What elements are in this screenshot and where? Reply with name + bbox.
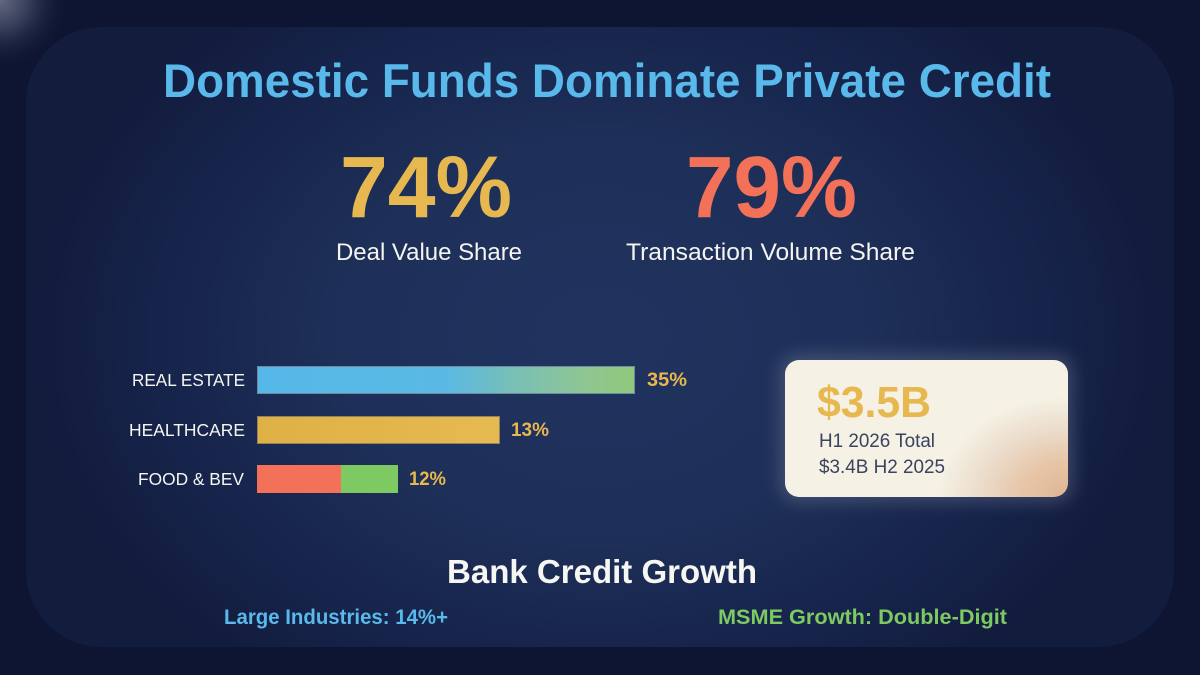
card line: h2 2025: $3.4B H2 2025 bbox=[819, 457, 945, 478]
stat label: transaction volume share: Transaction Volume Share bbox=[626, 239, 915, 266]
label: large industries: Large Industries: 14%+ bbox=[224, 606, 448, 629]
bar chart: sector shares bbox=[129, 366, 687, 493]
stat: deal value share bbox=[336, 139, 522, 266]
title: Domestic Funds Dominate Private Credit bbox=[163, 54, 1051, 107]
bar row: food and bev 12%: FOOD & BEV bbox=[138, 469, 244, 489]
label: msme growth: MSME Growth: Double-Digit bbox=[718, 606, 1007, 629]
bar row: healthcare 13%: HEALTHCARE bbox=[129, 420, 245, 440]
heading: bank credit growth: Bank Credit Growth bbox=[447, 553, 757, 590]
callout card: total bbox=[779, 354, 1074, 503]
card value: $3.5B bbox=[817, 378, 931, 427]
stat number: 74%: 74% bbox=[340, 139, 512, 236]
bar row: real estate 35%: 35% bbox=[647, 370, 687, 391]
bar row: healthcare 13% bbox=[129, 416, 549, 444]
stat: transaction volume share bbox=[626, 139, 915, 266]
bar row: food and bev 12% bbox=[138, 465, 446, 493]
bar row: real estate 35% bbox=[132, 366, 687, 394]
bar row: healthcare 13%: 13% bbox=[511, 420, 549, 441]
card line: h1 2026 total: H1 2026 Total bbox=[819, 431, 935, 452]
stat label: deal value share: Deal Value Share bbox=[336, 239, 522, 266]
bar row: real estate 35%: REAL ESTATE bbox=[132, 370, 245, 390]
stat number: 79%: 79% bbox=[686, 139, 857, 236]
bar row: food and bev 12%: 12% bbox=[409, 469, 446, 490]
